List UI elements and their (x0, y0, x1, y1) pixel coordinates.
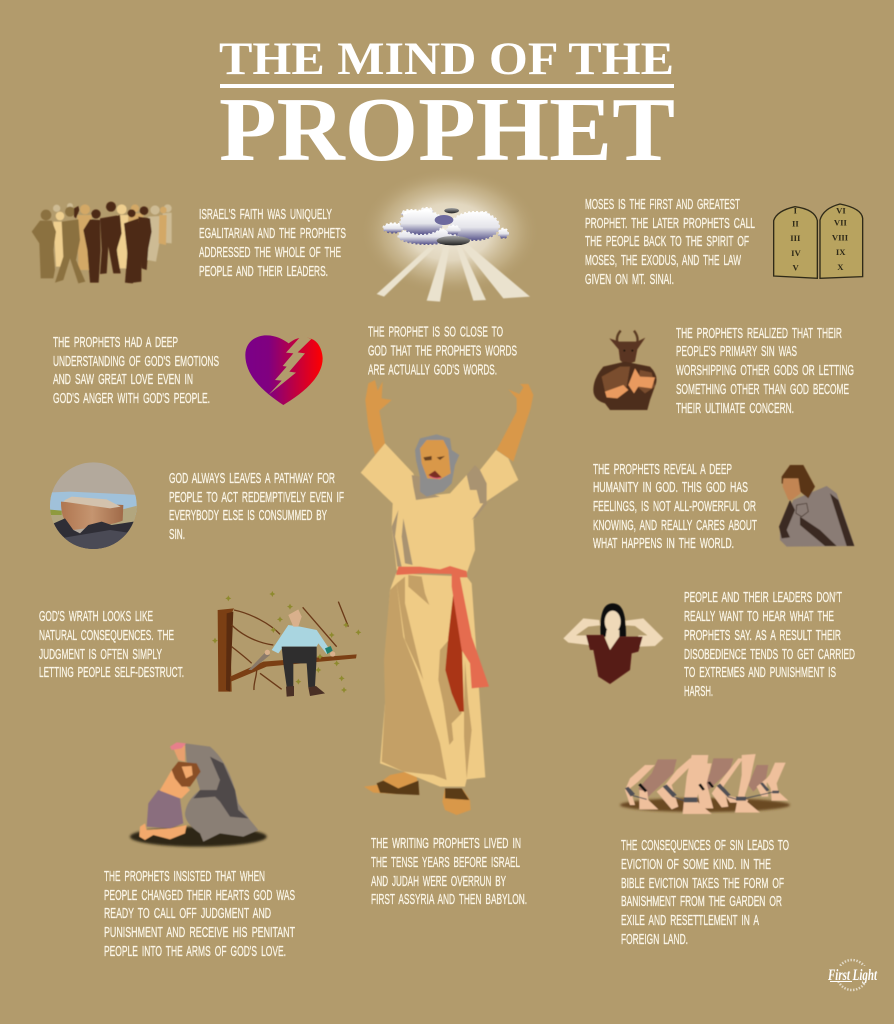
text: eviction: EVICTION OF SOME KIND. IN THE (621, 856, 771, 873)
text: close to God (368, 324, 517, 378)
icon: woman plugging her ears (563, 603, 663, 684)
text: close to God: ARE ACTUALLY GOD'S WORDS. (368, 362, 497, 378)
text: change of heart: PEOPLE CHANGED THEIR HEARTS GOD WAS (104, 887, 295, 904)
text: close to God: GOD THAT THE PROPHETS WORDS (368, 342, 517, 360)
icon: grieving figure (779, 465, 854, 547)
icon: man sawing his own branch (212, 591, 361, 697)
icon: stone tablets: VIII (832, 233, 849, 243)
text: change of heart: PEOPLE INTO THE ARMS OF GOD'S LOVE. (104, 943, 286, 960)
text: humanity in God: WHAT HAPPENS IN THE WORLD. (593, 535, 734, 552)
text: close to God: THE PROPHET IS SO CLOSE TO (368, 324, 503, 340)
text: eviction: EXILE AND RESETTLEMENT IN A (621, 912, 759, 929)
text: egalitarian faith: EGALITARIAN AND THE PROPHETS (199, 225, 346, 242)
text: primary sin (676, 325, 854, 417)
icon: stone tablets: VII (834, 218, 847, 228)
text: humanity in God: HUMANITY IN GOD. THIS GOD HAS (593, 479, 748, 496)
text: humanity in God: THE PROPHETS REVEAL A DEEP (593, 461, 732, 478)
icon: stone tablets: IV (791, 248, 802, 258)
text: natural consequences: GOD'S WRATH LOOKS LIKE (39, 608, 153, 625)
text: unwilling to hear: HARSH. (684, 683, 713, 700)
icon: horned idol (593, 331, 657, 410)
text: change of heart: THE PROPHETS INSISTED THAT WHEN (104, 868, 265, 885)
icon: stone tablets: IX (836, 247, 846, 257)
icon: stone tablets: I (794, 205, 798, 215)
text: God's emotions: THE PROPHETS HAD A DEEP (53, 334, 178, 351)
text: Moses: MOSES IS THE FIRST AND GREATEST (585, 196, 740, 213)
text: eviction (621, 837, 789, 948)
text: egalitarian faith: PEOPLE AND THEIR LEADERS. (199, 263, 328, 280)
text: writing prophets: THE WRITING PROPHETS LIVED IN (371, 835, 521, 852)
text: natural consequences: LETTING PEOPLE SELF-DESTRUCT. (39, 664, 184, 681)
prophet sash (396, 566, 489, 712)
text: Moses: MOSES, THE EXODUS, AND THE LAW (585, 252, 741, 269)
text: God's emotions: GOD'S ANGER WITH GOD'S PEOPLE. (53, 390, 210, 407)
icon: shackled feet (620, 754, 790, 814)
icon: crowd of silhouettes (32, 202, 172, 283)
text: God's emotions (53, 334, 219, 407)
text: unwilling to hear (684, 589, 855, 700)
text: writing prophets: FIRST ASSYRIA AND THEN BABYLON. (371, 891, 527, 908)
text: egalitarian faith: ISRAEL'S FAITH WAS UNIQUELY (199, 206, 332, 223)
text: redemptive pathway: SIN. (169, 526, 185, 543)
text: Moses (585, 196, 755, 288)
icon: broken heart (245, 335, 323, 405)
icon: stone tablets: II (792, 218, 799, 228)
text: writing prophets: AND JUDAH WERE OVERRUN BY (371, 873, 506, 890)
text: humanity in God: FEELINGS, IS NOT ALL-POWERFUL OR (593, 498, 756, 515)
title (219, 33, 675, 180)
text: eviction: FOREIGN LAND. (621, 931, 688, 948)
prophet robe (361, 443, 518, 787)
icon: father embracing penitent son (130, 742, 267, 847)
prophet head (415, 434, 459, 497)
text: change of heart: PUNISHMENT AND RECEIVE HIS PENITANT (104, 924, 295, 941)
text: natural consequences (39, 608, 184, 681)
text: change of heart (104, 868, 295, 960)
illustration: central prophet (361, 380, 533, 815)
text: Moses: PROPHET. THE LATER PROPHETS CALL (585, 215, 755, 232)
icon: ark in circle (50, 462, 137, 549)
icon: stone tablets: V (793, 263, 800, 273)
text: humanity in God (593, 461, 757, 552)
logo: First Light (826, 960, 880, 990)
text: primary sin: THEIR ULTIMATE CONCERN. (676, 400, 794, 417)
text: Moses: GIVEN ON MT. SINAI. (585, 271, 674, 288)
text: redemptive pathway: PEOPLE TO ACT REDEMPTIVELY EVEN IF (169, 489, 344, 506)
text: egalitarian faith (199, 206, 346, 280)
text: egalitarian faith: ADDRESSED THE WHOLE OF THE (199, 244, 341, 261)
text: primary sin: PEOPLE'S PRIMARY SIN WAS (676, 343, 797, 360)
text: humanity in God: KNOWING, AND REALLY CARES ABOUT (593, 517, 757, 534)
text: natural consequences: JUDGMENT IS OFTEN SIMPLY (39, 646, 162, 663)
prophet feet (364, 772, 471, 815)
text: God's emotions: UNDERSTANDING OF GOD'S EMOTIONS (53, 353, 219, 370)
text: redemptive pathway: EVERYBODY ELSE IS CONSUMMED BY (169, 507, 327, 524)
text: God's emotions: AND SAW GREAT LOVE EVEN IN (53, 371, 193, 388)
text: change of heart: READY TO CALL OFF JUDGMENT AND (104, 905, 271, 922)
text: redemptive pathway (169, 470, 344, 543)
title: THE MIND OF THE (219, 33, 674, 85)
text: writing prophets (371, 835, 527, 908)
prophet arms (365, 380, 533, 462)
icon: stone tablets: X (837, 262, 844, 272)
text: Moses: THE PEOPLE BACK TO THE SPIRIT OF (585, 233, 749, 250)
icon: stone tablets (774, 204, 863, 278)
text: redemptive pathway: GOD ALWAYS LEAVES A PATHWAY FOR (169, 470, 335, 487)
text: writing prophets: THE TENSE YEARS BEFORE ISRAEL (371, 854, 520, 871)
icon: stone tablets: VI (836, 205, 846, 215)
title: PROPHET (219, 79, 675, 180)
icon: stone tablets: III (790, 233, 801, 243)
text: natural consequences: NATURAL CONSEQUENCES. THE (39, 627, 174, 644)
icon: cloud with light rays (360, 168, 540, 302)
